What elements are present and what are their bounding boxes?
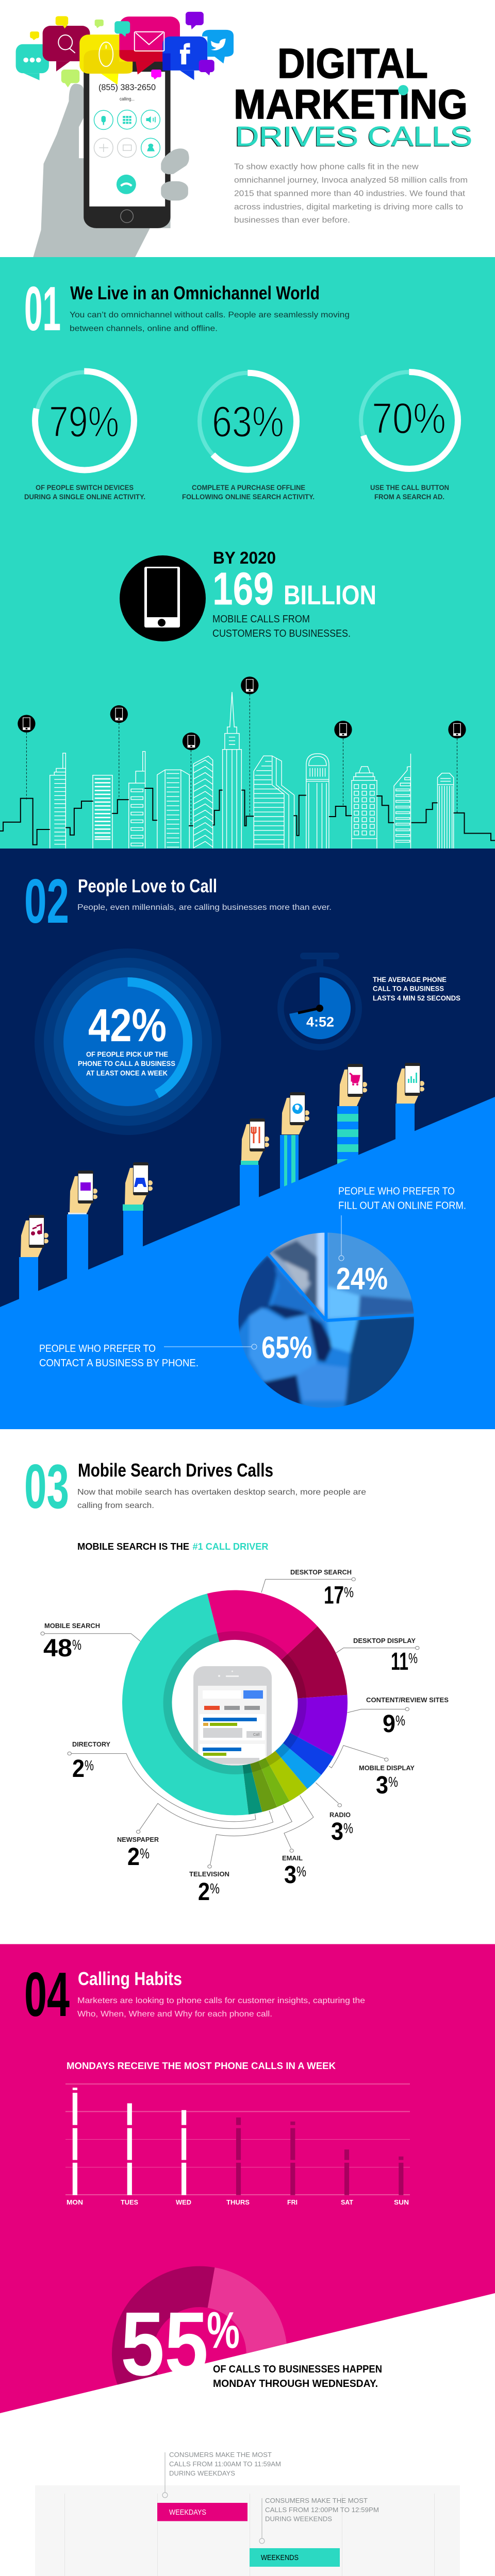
text: average call length: CALL TO A BUSINESS [373,985,444,993]
stat: email: EMAIL [282,1854,303,1862]
text: 70 percent label [370,483,449,501]
stat: desktop search: DESKTOP SEARCH [290,1568,352,1576]
background: blue diagonal [0,1097,495,1429]
icon: stopwatch [277,953,362,1050]
icon: large phone [120,555,206,641]
stat: directory [72,1740,110,1783]
section number 03: 03 [24,1451,69,1521]
stat: mobile display: % [388,1774,398,1790]
stat: desktop display [353,1637,418,1675]
stat: email: % [296,1863,306,1879]
chart: calls per weekday: FRI [287,2198,298,2206]
text: 70 percent label: USE THE CALL BUTTON [370,483,449,492]
illustration: city skyline [0,676,495,849]
chart: calls per weekday: MON [67,2198,83,2206]
chart: 79 percent ring [35,371,134,470]
text: 63 percent label [182,483,315,501]
panel: section 2 people love to call [0,849,495,1429]
illustration: hand holding phone [33,50,189,257]
text: calling habits intro [77,1996,365,2019]
stat: mobile search: % [72,1637,81,1653]
bar: weekends: WEEKENDS [261,2553,299,2562]
stat: newspaper: % [140,1845,150,1861]
stat: television: % [210,1880,220,1896]
callout lines [164,1215,344,1349]
text: intro paragraph: To show exactly how phone calls fit in the new [234,163,419,171]
text: 63 percent label: COMPLETE A PURCHASE OFFLINE [192,483,305,492]
stat: mobile display: MOBILE DISPLAY [359,1764,415,1772]
chart: 42 percent concentric circle: 42% [88,1000,167,1052]
chart: 55 percent ring: 55 [121,2294,208,2395]
stat: content review sites: 9 [383,1710,395,1738]
panel: section 4 calling habits [0,1944,495,2576]
text: intro paragraph: omnichannel journey, Invoca analyzed 58 million calls from [234,176,468,184]
text: 79 percent label: DURING A SINGLE ONLINE ACTIVITY. [24,493,145,501]
callout: weekends note: DURING WEEKENDS [265,2515,332,2523]
chart: photo pie 65 and 24 percent: 65% [261,1330,312,1365]
text: phone contact label: CONTACT A BUSINESS BY PHONE. [39,1358,199,1369]
text: calling: calling... [120,96,135,101]
stat: content review sites [366,1696,449,1738]
stat: desktop search: 17 [324,1582,344,1609]
text: omnichannel intro: You can’t do omnichannel without calls. People are seamlessly moving [70,311,350,319]
chart: calls per weekday: TUES [121,2198,138,2206]
chart: 42 percent concentric circle: AT LEAST ONCE A WEEK [86,1069,168,1077]
heading: omnichannel: We Live in an Omnichannel World [70,282,320,303]
callout: weekdays note [162,2451,281,2498]
stat: desktop search: % [344,1584,354,1600]
title: MARKETING [234,81,468,128]
text: monday through wednesday: OF CALLS TO BUSINESSES HAPPEN [213,2364,382,2375]
text: mobile search intro: Now that mobile search has overtaken desktop search, more people are [77,1488,366,1497]
title [234,40,472,152]
text: intro paragraph: businesses than ever before. [234,216,350,225]
stat: email: 3 [284,1861,296,1889]
background: pink angled panel [0,1944,495,2413]
chart: 79 percent ring: 79% [49,398,119,446]
chart: 42 percent concentric circle: OF PEOPLE PICK UP THE [86,1050,168,1058]
stat: 169 billion [212,548,376,639]
heading: calling habits: Calling Habits [78,1968,182,1989]
heading: mobile search: Mobile Search Drives Calls [78,1460,273,1481]
chart: 63 percent ring: 63% [212,398,284,446]
stat: 169 billion: CUSTOMERS TO BUSINESSES. [212,628,351,639]
text: intro paragraph: 2015 that spanned more than 40 industries. We found that [234,190,466,198]
chart: 55 percent ring: % [207,2301,240,2359]
heading: number one call driver [77,1541,268,1552]
section number 01: 01 [24,274,61,344]
callout: weekends note: CALLS FROM 12:00PM TO 12:59PM [265,2506,379,2514]
panel: section 3 mobile search [26,1463,449,1900]
stat: 169 billion: 169 [212,564,274,615]
callout: weekdays note: CALLS FROM 11:00AM TO 11:59AM [169,2460,281,2468]
text: omnichannel intro [70,311,350,333]
icon: message bubbles [16,12,234,88]
text: average call length [373,975,460,1002]
stat: 169 billion: BY 2020 [213,548,276,567]
icon: stopwatch: 4:52 [306,1014,334,1029]
section number 04: 04 [24,1959,70,2029]
title: DIGITAL [277,40,428,87]
callout: weekdays note: DURING WEEKDAYS [169,2469,235,2477]
chart: photo pie 65 and 24 percent: 24% [336,1261,388,1296]
chart: 42 percent concentric circle [35,948,221,1135]
chart: 63 percent ring [200,373,296,470]
stat: mobile search: 48 [43,1635,72,1662]
chart: call driver donut [122,1590,348,1816]
title: DRIVES CALLS [235,121,472,152]
text: 79 percent label: OF PEOPLE SWITCH DEVICES [36,483,134,492]
chart: 55 percent ring [112,2266,287,2385]
panel: header [0,0,495,257]
bar: weekdays: WEEKDAYS [169,2508,206,2517]
stat: radio [329,1811,353,1845]
text: monday through wednesday [213,2364,382,2389]
stat: radio: 3 [331,1818,343,1845]
heading: mondays: MONDAYS RECEIVE THE MOST PHONE CALLS IN A WEEK [67,2061,336,2071]
callout: weekdays note: CONSUMERS MAKE THE MOST [169,2451,272,2459]
bar: weekends [250,2548,340,2567]
chart: 70 percent ring: 70% [372,394,446,443]
text: average call length: THE AVERAGE PHONE [373,975,447,984]
text: intro paragraph [234,163,468,225]
text: average call length: LASTS 4 MIN 52 SECONDS [373,994,460,1002]
chart: photo pie 65 and 24 percent [238,1232,414,1408]
stat: desktop display: DESKTOP DISPLAY [353,1637,416,1645]
stat: newspaper [117,1836,159,1871]
text: mobile search intro: calling from search. [77,1501,154,1510]
chart: time of day timeline [35,2451,460,2576]
stat: newspaper: 2 [127,1843,140,1871]
heading: number one call driver: MOBILE SEARCH IS THE [77,1541,189,1552]
callout lines [41,1578,419,1713]
title: DRIVES CALLS [234,122,472,152]
stat: directory: 2 [72,1755,85,1783]
stat: directory: % [85,1757,94,1773]
stat: radio: % [343,1820,353,1836]
stat: 169 billion: MOBILE CALLS FROM [212,614,310,625]
illustration: raised hands with phones [19,1063,424,1309]
chart: calls per weekday: WED [176,2198,191,2206]
chart: 42 percent concentric circle: PHONE TO CALL A BUSINESS [78,1059,175,1067]
stat: mobile display [359,1764,415,1799]
section number 02: 02 [24,866,69,936]
bar: weekdays [157,2503,248,2521]
heading: number one call driver: #1 CALL DRIVER [193,1541,268,1552]
text: omnichannel intro: between channels, online and offline. [70,325,218,333]
stat: mobile search [43,1622,100,1662]
chart: calls per weekday: THURS [226,2198,250,2206]
stat: email [282,1854,306,1889]
text: 70 percent label: FROM A SEARCH AD. [374,493,444,501]
sleeve: arms on blue [19,1104,415,1298]
text: 79 percent label [24,483,145,501]
stat: mobile display: 3 [376,1772,388,1799]
text: online form label [338,1186,466,1212]
text: online form label: FILL OUT AN ONLINE FORM. [338,1200,466,1212]
chart: 70 percent ring [361,372,458,469]
chart: calls per weekday: SAT [341,2198,353,2206]
stat: desktop search [290,1568,354,1609]
text: monday through wednesday: MONDAY THROUGH WEDNESDAY. [213,2378,378,2389]
callout: weekends note [259,2497,379,2544]
stat: desktop display: % [408,1650,418,1666]
text: 63 percent label: FOLLOWING ONLINE SEARCH ACTIVITY. [182,493,315,501]
stat: radio: RADIO [329,1811,351,1819]
stat: directory: DIRECTORY [72,1740,110,1748]
stat: 169 billion: BILLION [284,580,376,611]
text: online form label: PEOPLE WHO PREFER TO [338,1186,455,1197]
text: mobile search intro [77,1488,366,1510]
text: people intro: People, even millennials, are calling businesses more than ever. [77,903,332,912]
chart: calls per weekday: SUN [394,2198,409,2206]
illustration: phone search screen: Call [253,1733,260,1737]
chart: calls per weekday [65,2083,410,2206]
text: phone contact label [39,1343,199,1369]
stat: desktop display: 11 [391,1648,408,1675]
stat: newspaper: NEWSPAPER [117,1836,159,1843]
text: phone contact label: PEOPLE WHO PREFER TO [39,1343,156,1354]
heading: people love to call: People Love to Call [78,875,217,896]
text: calling habits intro: Marketers are looking to phone calls for customer insights, capturing the [77,1996,365,2005]
text: phone number: (855) 383-2650 [98,82,156,92]
stat: content review sites: % [395,1713,405,1728]
callout: weekends note: CONSUMERS MAKE THE MOST [265,2497,368,2504]
text: intro paragraph: across industries, digital marketing is driving more calls to [234,203,463,211]
text: calling habits intro: Who, When, Where and Why for each phone call. [77,2010,272,2019]
illustration: phone search screen [193,1666,272,1769]
stat: content review sites: CONTENT/REVIEW SITES [366,1696,449,1704]
stat: television: 2 [198,1878,210,1906]
stat: mobile search: MOBILE SEARCH [44,1622,100,1630]
stat: television [189,1870,229,1906]
panel: section 1 omnichannel [0,257,495,849]
stat: television: TELEVISION [189,1870,229,1878]
